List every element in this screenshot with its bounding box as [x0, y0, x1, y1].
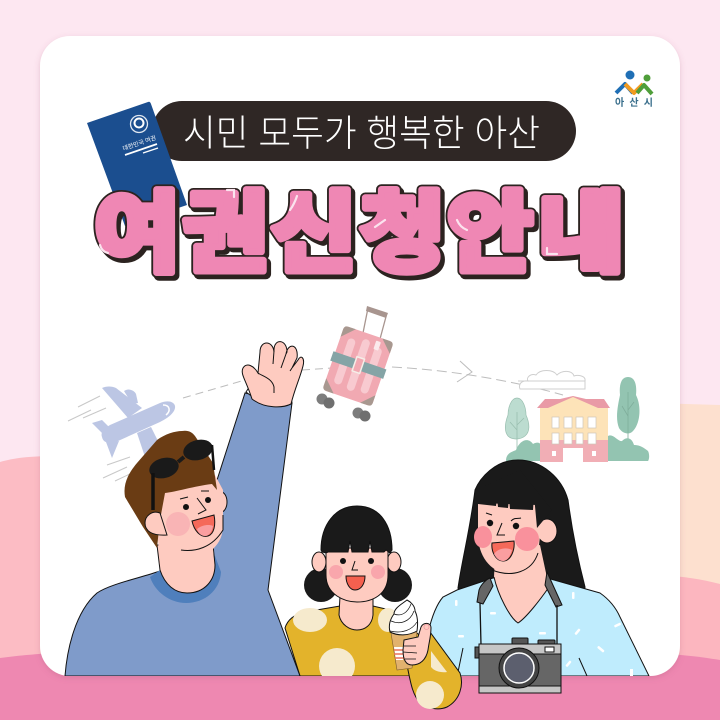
man waving — [65, 342, 304, 676]
logo: Asan city: 아산시 — [615, 96, 653, 109]
icon: suitcase — [316, 306, 396, 422]
icon: passport: 대한민국 여권 — [122, 134, 157, 153]
logo: Asan city — [615, 70, 653, 109]
subtitle pill — [152, 101, 576, 161]
title highlights — [100, 190, 557, 254]
child with hair buns — [285, 506, 425, 684]
icon: camera — [475, 572, 562, 693]
icon: airplane — [68, 386, 175, 481]
child's arm with ice cream — [389, 600, 461, 709]
panel: white card — [40, 36, 680, 676]
dashed flight path with arrow — [183, 361, 563, 398]
icon: passport — [87, 102, 187, 226]
title: 여권신청안내 — [94, 185, 624, 283]
people clipped to card — [65, 342, 649, 684]
title: 여권신청안내 — [97, 188, 627, 286]
title: 여권신청안내 — [94, 185, 624, 283]
woman with long hair — [428, 460, 649, 676]
subtitle pill: 시민 모두가 행복한 아산 — [183, 113, 540, 154]
illustration: hotel with trees — [505, 370, 649, 462]
